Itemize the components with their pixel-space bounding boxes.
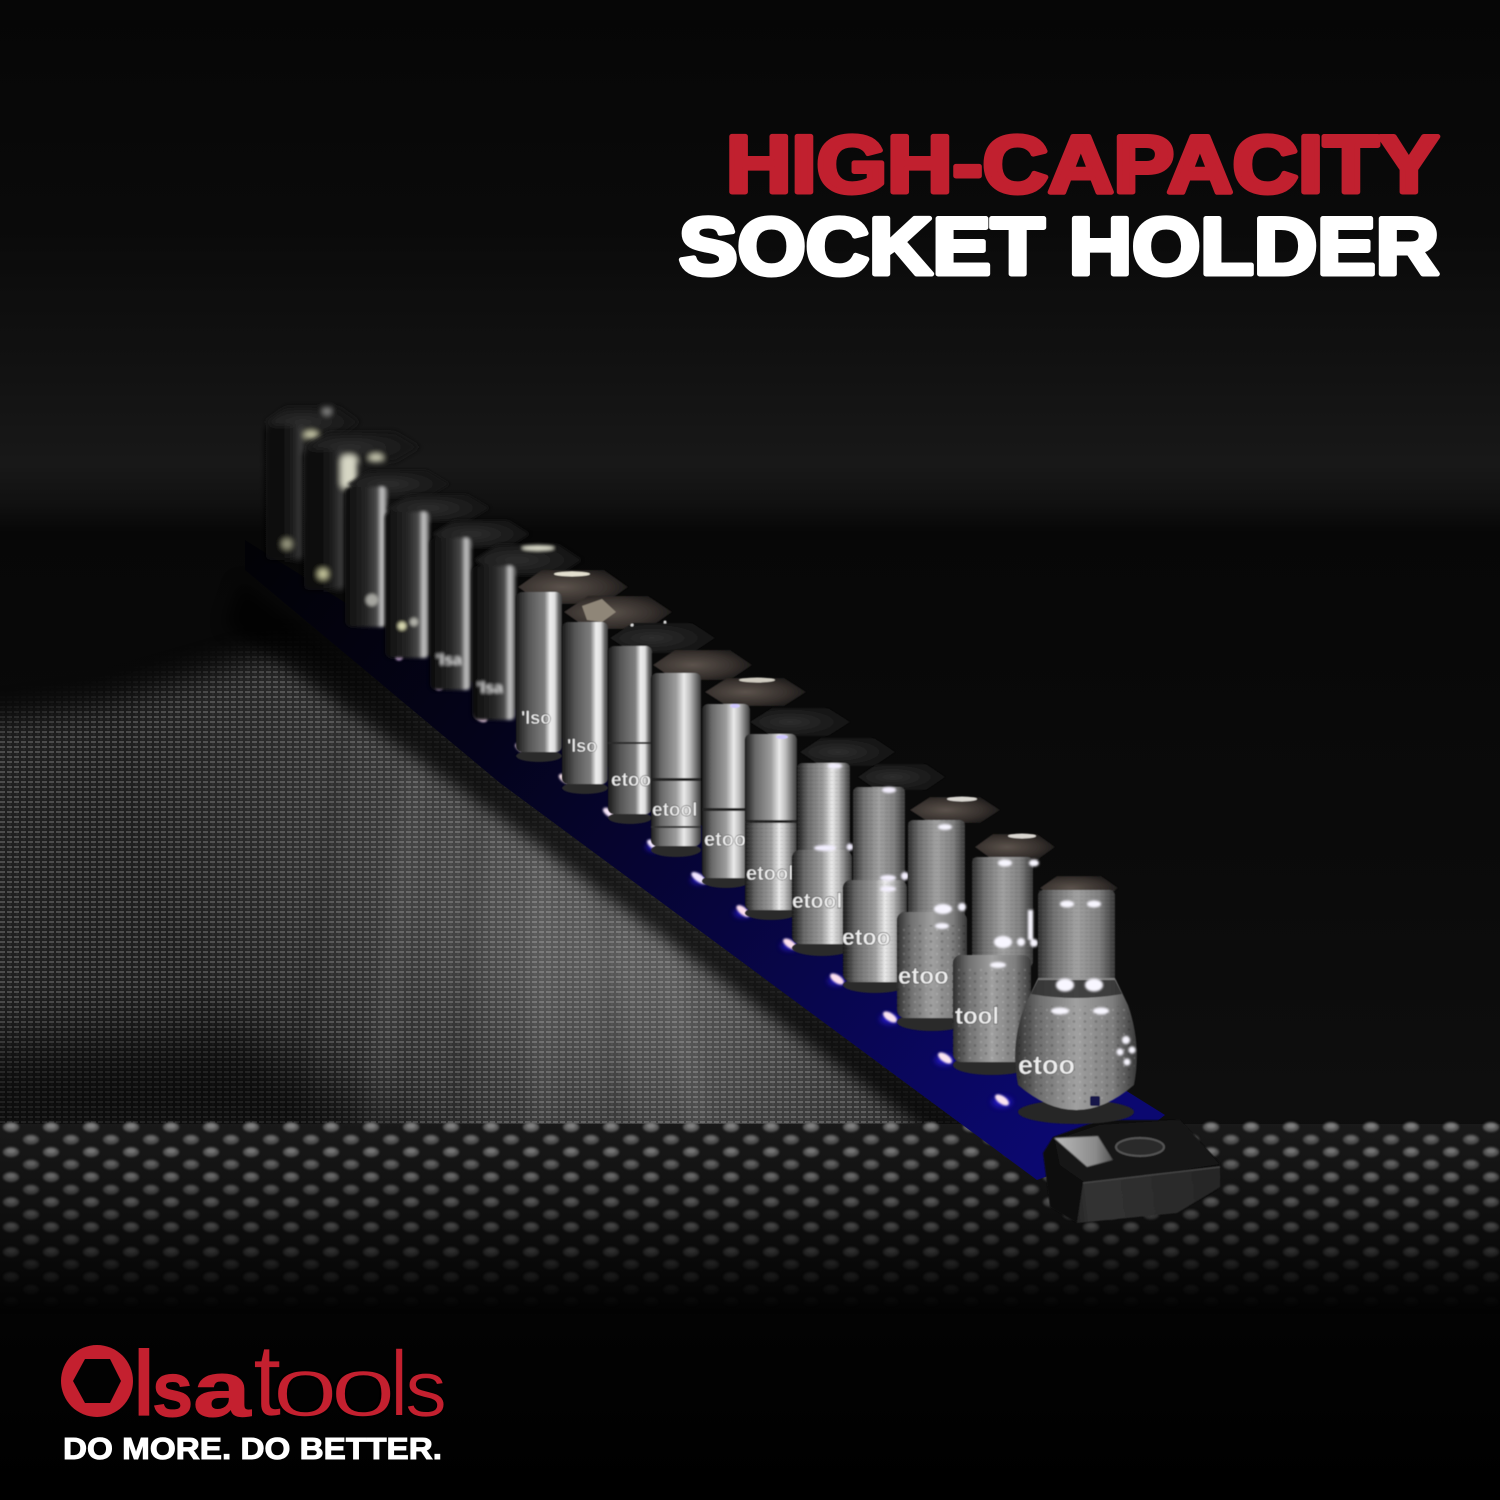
logo hexagon O — [61, 1345, 133, 1417]
tagline: DO MORE. DO BETTER. — [63, 1431, 442, 1466]
socket 6: 'lsa — [477, 680, 503, 697]
title — [679, 120, 1439, 292]
bracket mounting hole — [1116, 1138, 1164, 1156]
wordmark: o — [330, 1340, 396, 1434]
wordmark: t — [253, 1323, 281, 1437]
wordmark: o — [272, 1340, 338, 1434]
wordmark — [134, 1323, 447, 1437]
row of chrome sockets — [265, 407, 1137, 1124]
socket 8 — [562, 596, 672, 794]
socket 13: etool — [792, 890, 842, 913]
end bracket — [1043, 1120, 1220, 1223]
socket 11: etoo — [704, 829, 746, 851]
wordmark: s — [152, 1346, 193, 1433]
rail shadow on fabric — [225, 580, 1037, 1185]
socket 15 — [897, 796, 1000, 1031]
wordmark: l — [391, 1332, 407, 1435]
socket 11 — [702, 678, 806, 888]
rail light reflections — [395, 654, 1012, 1108]
socket 5: 'lsa — [436, 652, 462, 669]
wordmark: s — [405, 1345, 447, 1434]
socket 7 — [516, 570, 628, 762]
socket 13 — [792, 738, 895, 956]
socket 6 — [472, 544, 582, 720]
socket 12 — [745, 708, 850, 920]
socket 7: 'lso — [521, 708, 551, 728]
socket 10 — [651, 650, 752, 857]
socket 1 — [265, 407, 360, 560]
socket 5 — [430, 520, 530, 690]
wordmark: a — [193, 1346, 252, 1433]
title line 1: HIGH-CAPACITY — [726, 120, 1439, 210]
socket 9 — [608, 620, 715, 824]
magnetic rail — [245, 540, 1165, 1180]
socket 4 — [385, 494, 490, 658]
textured mat — [0, 1121, 1500, 1290]
socket 16 — [953, 834, 1055, 1075]
socket 15: etoo — [898, 963, 949, 990]
socket 3 — [345, 470, 450, 627]
socket 17, nearest — [1015, 876, 1137, 1124]
fabric surface lit from the rail — [0, 647, 960, 1124]
socket 8: 'lso — [567, 736, 597, 756]
socket 14 — [842, 764, 945, 993]
socket 9: etoo — [611, 770, 651, 791]
socket 17, nearest: etoo — [1018, 1050, 1075, 1080]
socket 10: etool — [652, 800, 697, 821]
socket 14: etoo — [842, 924, 891, 950]
socket 2 — [303, 432, 420, 590]
logo — [61, 1323, 447, 1466]
title line 2: SOCKET HOLDER — [679, 202, 1439, 292]
socket 16: tool — [955, 1003, 999, 1030]
wordmark: l — [134, 1332, 154, 1435]
socket 12: etool — [746, 863, 794, 885]
